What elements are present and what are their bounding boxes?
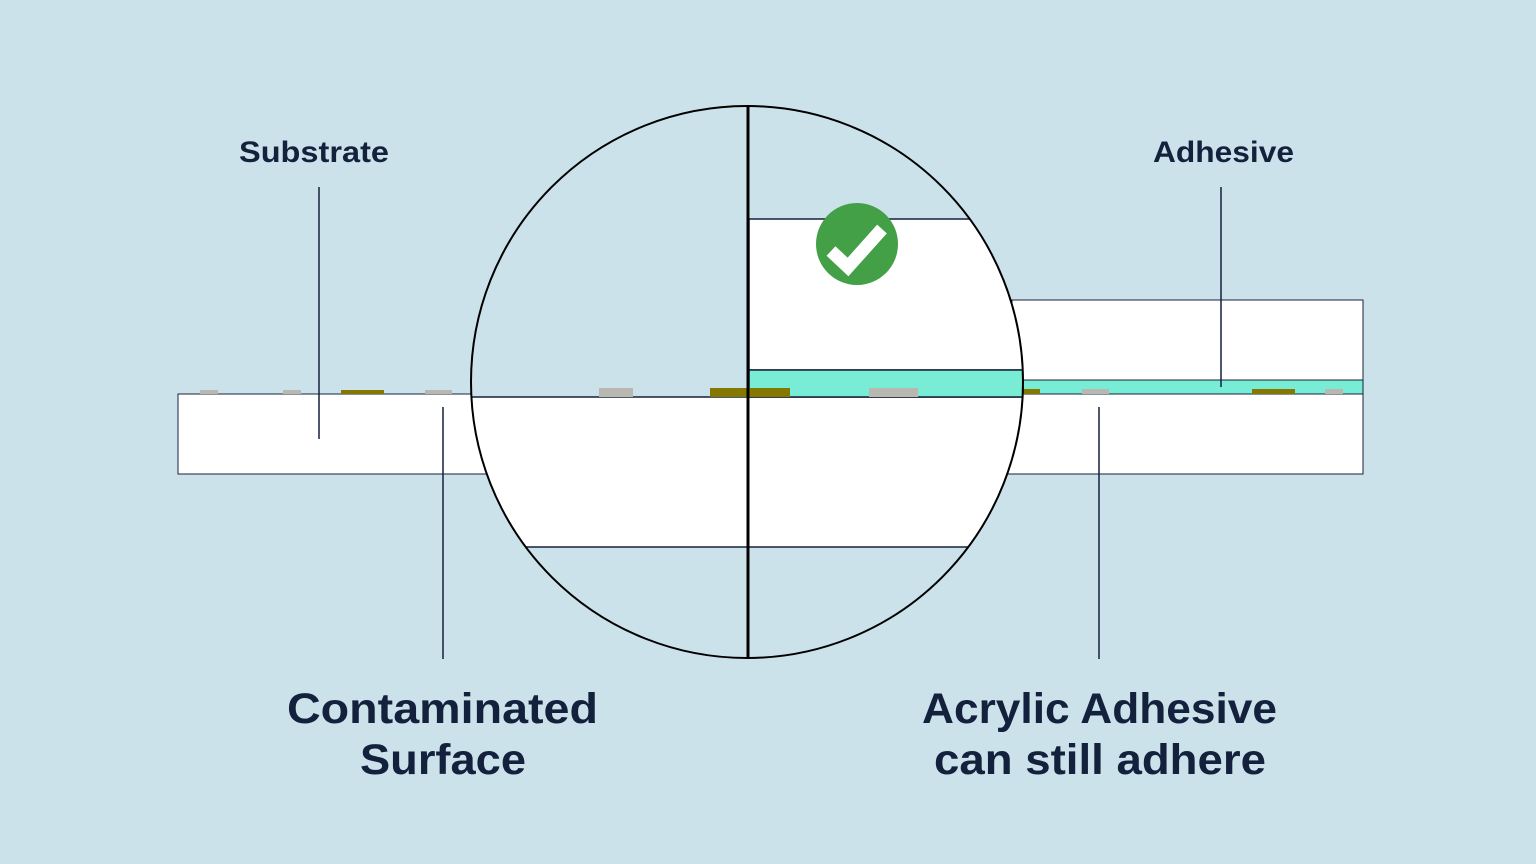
label: Substrate: Substrate xyxy=(239,136,389,169)
leader lines xyxy=(319,187,1221,659)
caption: Contaminated Surface: Contaminated xyxy=(287,685,598,733)
caption: Acrylic Adhesive can still adhere: Acrylic Adhesive xyxy=(922,685,1277,733)
caption: Contaminated Surface: Surface xyxy=(360,736,526,784)
magnified circle xyxy=(470,105,1024,659)
icon: check badge xyxy=(816,203,898,285)
substrate strip xyxy=(178,394,1363,474)
contaminants outside xyxy=(200,389,1343,394)
caption: Acrylic Adhesive can still adhere: can still adhere xyxy=(934,736,1266,784)
label: Adhesive: Adhesive xyxy=(1153,136,1294,169)
adhesive strip right xyxy=(1012,300,1363,394)
